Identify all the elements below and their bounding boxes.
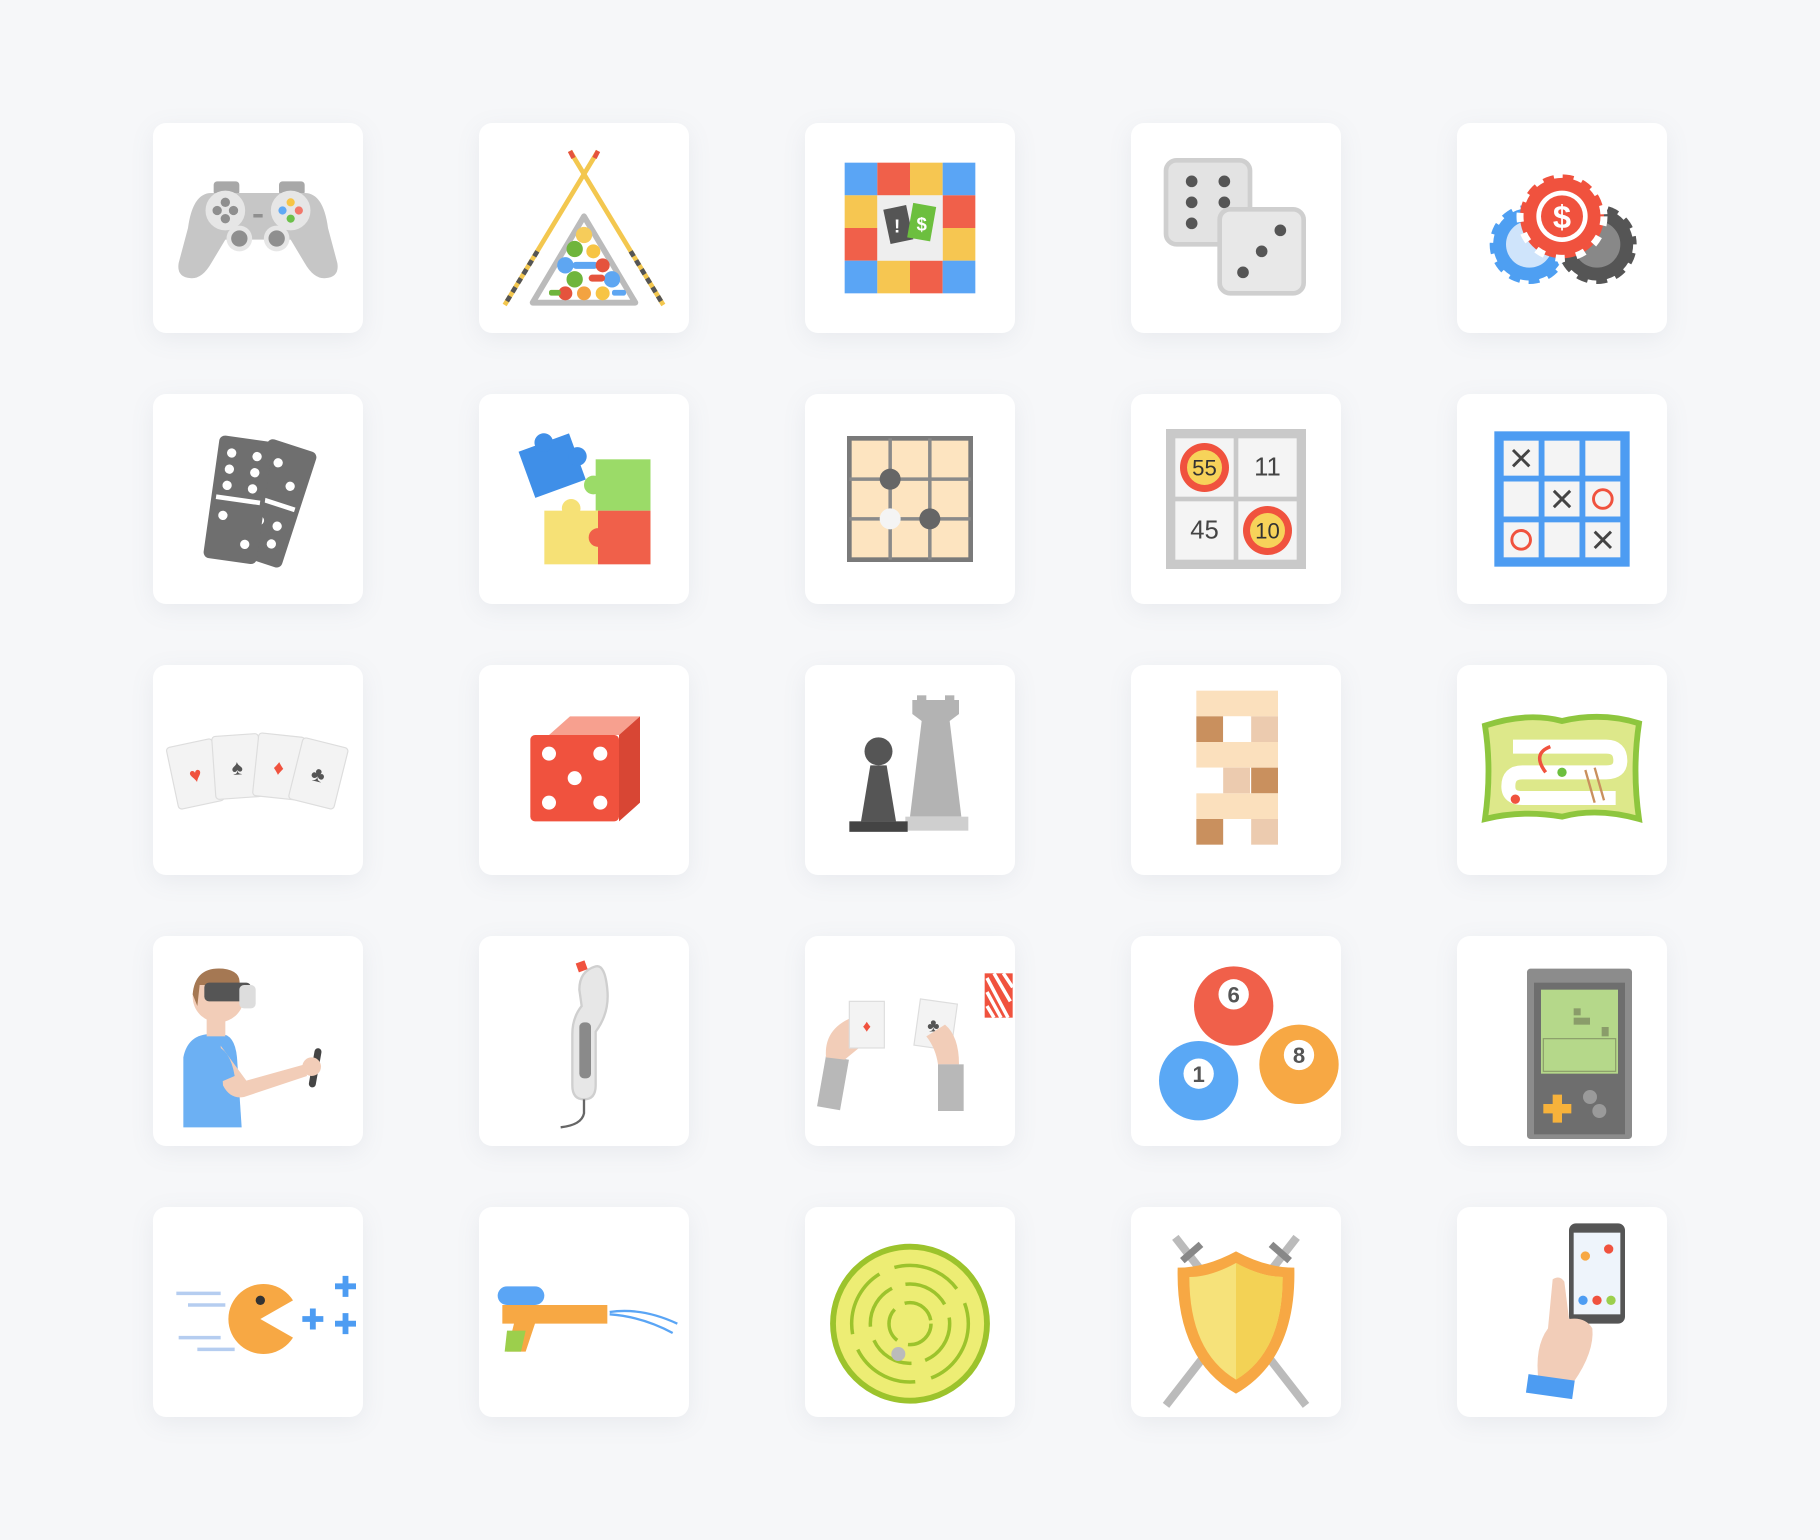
card: hands with cards (805, 936, 1015, 1146)
card: board game: ! (894, 216, 900, 237)
card: puzzle (479, 394, 689, 604)
card: casino chips: $ (1553, 198, 1571, 235)
card: gamepad (153, 123, 363, 333)
card: dominoes (153, 394, 363, 604)
card: chess (805, 665, 1015, 875)
card: billiard balls (1131, 936, 1341, 1146)
card: hands with cards: ♣ (927, 1015, 939, 1036)
card: playing cards: ♦ (272, 756, 286, 780)
card: hands with cards: ♦ (863, 1018, 871, 1036)
card: red die (479, 665, 689, 875)
card: maze (805, 1207, 1015, 1417)
card: jenga (1131, 665, 1341, 875)
card: vr player (153, 936, 363, 1146)
card: billiard balls: 6 (1228, 983, 1240, 1008)
card: tetris handheld (1457, 936, 1667, 1146)
card: playing cards: ♣ (309, 762, 328, 788)
card: playing cards (153, 665, 363, 875)
card: snakes board (1457, 665, 1667, 875)
card: billiard balls: 8 (1293, 1043, 1305, 1068)
card: bingo: 10 (1255, 519, 1280, 544)
card: joystick (479, 936, 689, 1146)
card: bingo: 55 (1192, 456, 1217, 481)
card: playing cards: ♠ (231, 756, 244, 780)
card: playing cards: ♥ (187, 763, 204, 788)
card: bingo (1131, 394, 1341, 604)
card: billiard balls: 1 (1193, 1062, 1205, 1087)
card: dice pair (1131, 123, 1341, 333)
card: tic tac toe (1457, 394, 1667, 604)
card: board game: $ (916, 213, 927, 234)
card: bingo: 11 (1254, 454, 1281, 482)
card: go board (805, 394, 1015, 604)
card: casino chips (1457, 123, 1667, 333)
card: water gun (479, 1207, 689, 1417)
card: phone hand (1457, 1207, 1667, 1417)
card: bingo: 45 (1190, 517, 1219, 545)
card: board game (805, 123, 1015, 333)
card: shield and swords (1131, 1207, 1341, 1417)
card: pool triangle (479, 123, 689, 333)
card: pacman (153, 1207, 363, 1417)
